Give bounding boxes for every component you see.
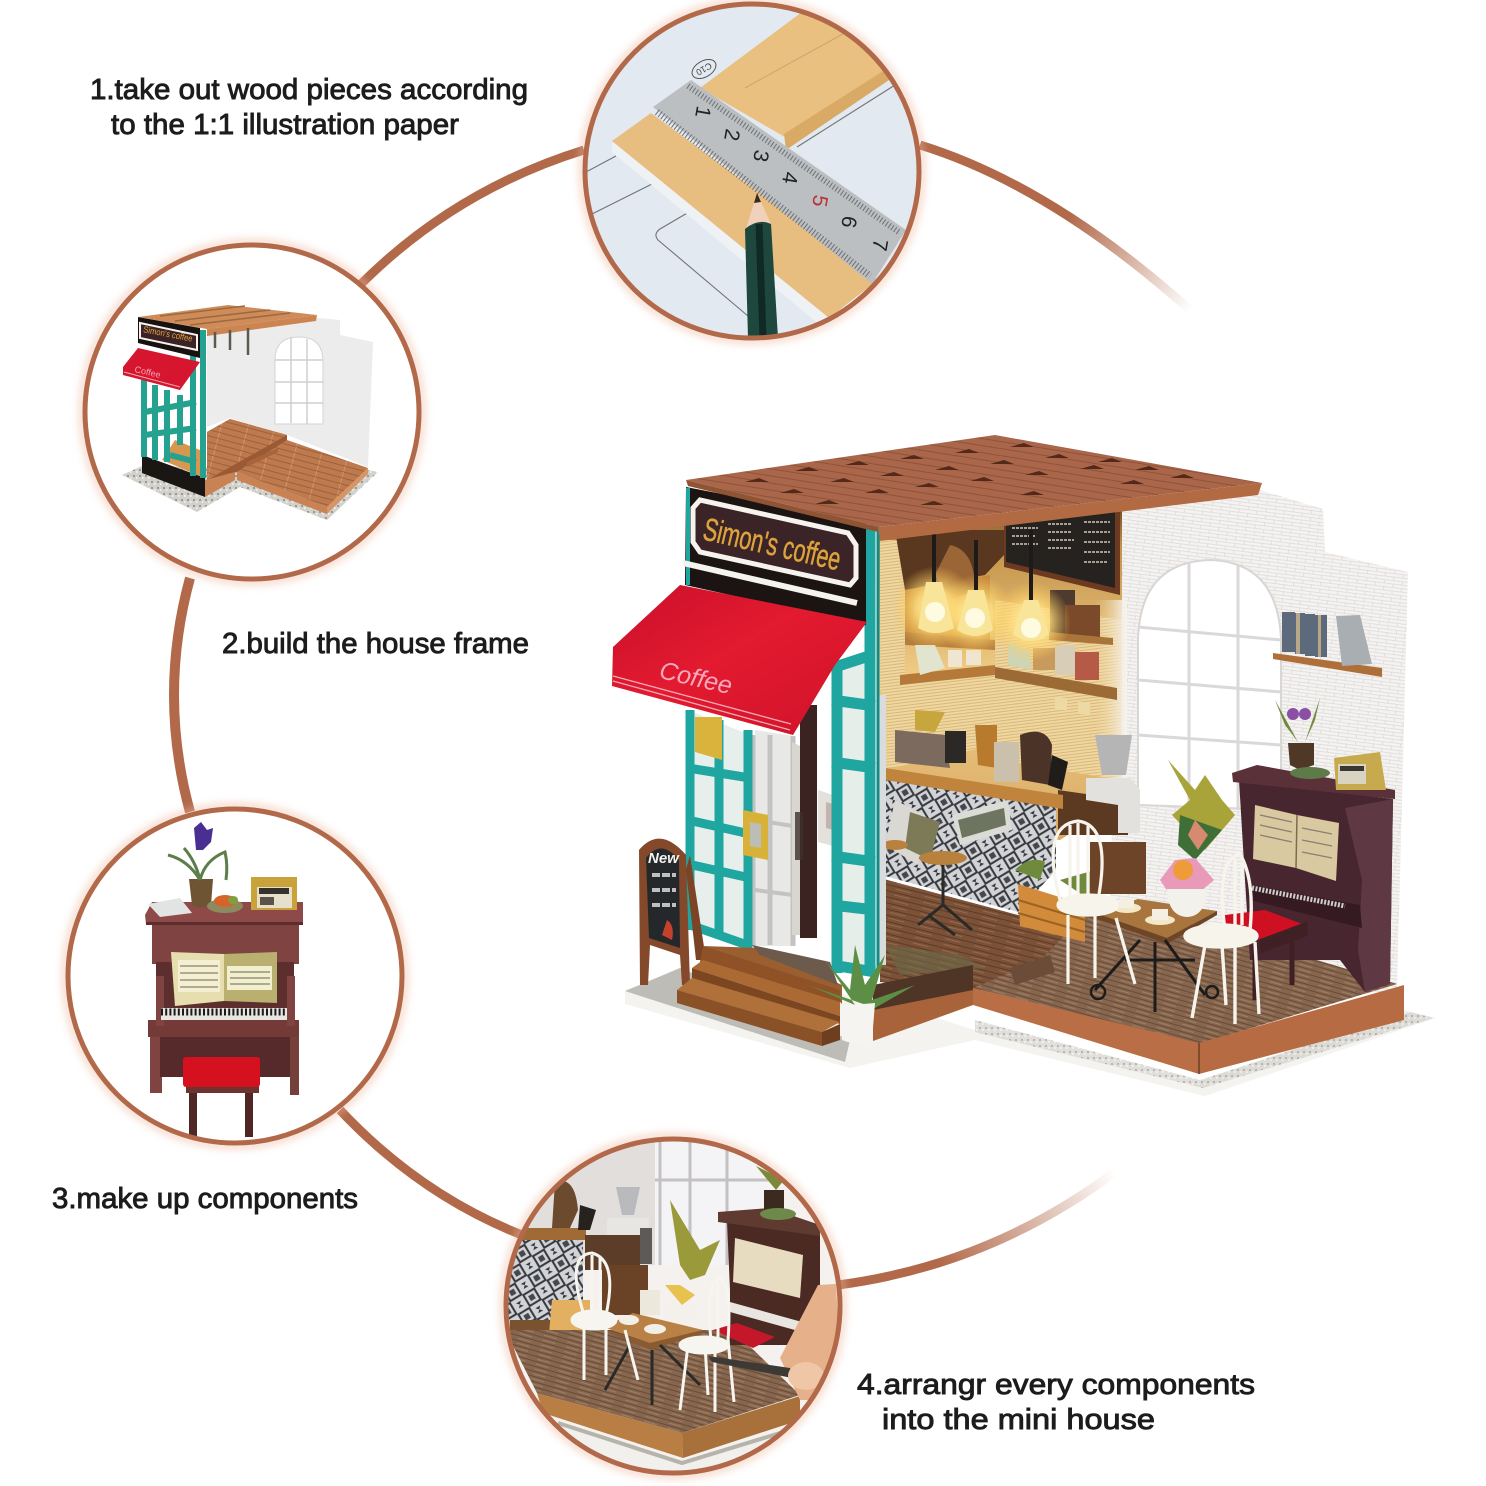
connecting arc: step 1 fading towards house (920, 145, 1190, 310)
open music book (171, 952, 277, 1006)
connecting arc: step 4 fading towards house (838, 1172, 1115, 1285)
steel ruler (653, 80, 906, 284)
step 4 caption: into the mini house (882, 1404, 1155, 1436)
white chair right (1185, 854, 1259, 1024)
raised wooden floor (880, 878, 1100, 992)
table (603, 1313, 704, 1405)
step 1 caption (90, 74, 528, 141)
floor and base (510, 1330, 800, 1466)
step 1 caption: 1.take out wood pieces according (90, 74, 528, 106)
small potted orchid (1275, 698, 1320, 770)
plain back wall (207, 318, 373, 467)
steel ruler: 7 (867, 237, 892, 253)
piano (718, 1208, 820, 1345)
paper on piano (148, 898, 192, 917)
flowers and vase (640, 1200, 720, 1326)
black shop fascia (685, 487, 866, 625)
piano body (145, 902, 303, 1095)
bar stools (882, 840, 972, 935)
connecting arc: step 3 to step 4 (340, 1110, 522, 1235)
white trim under sign (683, 563, 857, 603)
step 3 caption: 3.make up components (52, 1183, 358, 1215)
step 1 caption: to the 1:1 illustration paper (111, 109, 459, 141)
white base and gravel (625, 968, 1436, 1096)
coffee table (1091, 898, 1218, 1012)
three glowing pendant lamps (893, 530, 1071, 662)
white chairs (572, 1253, 734, 1412)
circle 3: piano component (65, 806, 405, 1146)
wooden plinth (873, 965, 1404, 1074)
wooden entrance steps (677, 945, 842, 1046)
chalkboard menu (1004, 510, 1120, 595)
circled part mark C10 (692, 59, 716, 79)
hand holding tweezers (708, 1284, 842, 1400)
teal right door frame (832, 525, 875, 975)
red piano bench (183, 1057, 260, 1137)
green floor mat (885, 945, 985, 975)
white brick right wall (1110, 490, 1408, 1010)
new menu a-frame sign: New (648, 850, 680, 867)
warm interior wall (878, 505, 1122, 840)
coffee counter (885, 768, 1063, 912)
grey strip beside door post (879, 695, 886, 965)
potted purple flower (168, 822, 227, 908)
circled part mark C10: C10 (694, 61, 714, 77)
window (655, 1140, 775, 1265)
red awning (612, 585, 867, 735)
circle 1: measuring wood with ruler and pencil (580, 0, 925, 345)
wooden wall shelves (900, 632, 1117, 700)
steel ruler: 6 (836, 214, 861, 230)
red awning (123, 348, 200, 390)
yellow radio (1334, 752, 1386, 790)
steel ruler: 3 (748, 148, 773, 164)
steel ruler: 1 (690, 104, 715, 120)
teal left door frame (688, 705, 817, 948)
white chair left (1053, 821, 1135, 984)
shop sign (138, 317, 200, 358)
arched window (275, 337, 323, 424)
main finished coffee house model (612, 435, 1436, 1096)
circle 4: arranging components in the mini house (500, 1135, 850, 1480)
steel ruler: 2 (719, 127, 744, 143)
red awning: Coffee (657, 656, 735, 700)
pencil (745, 193, 778, 338)
fruit plate (207, 895, 243, 913)
dark upright piano (1232, 765, 1395, 992)
warm-to-white wall transition (1095, 600, 1127, 800)
flower arrangement (1160, 760, 1235, 917)
small floor step block (1010, 955, 1055, 985)
counter with tile (508, 1228, 586, 1330)
step 4 caption (857, 1369, 1255, 1436)
cups, jars and packets on shelf (915, 642, 1099, 714)
upper wood strip (700, 6, 892, 150)
shop sign: Simon's coffee (143, 324, 193, 344)
lower wooden floor (973, 900, 1397, 1044)
lower wood strip (612, 113, 880, 330)
outer teal edge (876, 520, 880, 975)
connecting arc: step 1 to step 2 (360, 150, 584, 285)
crate and box (549, 1265, 648, 1330)
step 2 caption: 2.build the house frame (222, 628, 529, 660)
orange entry steps (162, 440, 200, 476)
new menu a-frame sign (639, 839, 706, 985)
red piano bench (1225, 910, 1305, 1000)
teal door frame (144, 330, 203, 478)
simon's coffee sign plaque (693, 500, 856, 585)
plant pot (756, 1166, 796, 1220)
radio (251, 877, 297, 910)
hanging lamp rods (215, 328, 248, 355)
roof beams (138, 305, 317, 336)
keyboard (161, 1008, 287, 1020)
cabinet behind counter (1058, 790, 1128, 835)
gravel base (122, 466, 378, 520)
red awning: Coffee (134, 364, 162, 380)
steel ruler: 5 (807, 193, 832, 209)
black base (142, 455, 205, 497)
counter goods (895, 710, 1140, 833)
pale panes in right frame (837, 660, 870, 970)
kettle and coffee machine (552, 1181, 652, 1270)
circle 2: house frame (82, 242, 422, 582)
arched window (1138, 560, 1281, 810)
plate of food (1290, 767, 1330, 779)
wall book shelf (1273, 612, 1382, 677)
teal left post top (686, 488, 690, 585)
floor planks (205, 419, 368, 514)
step 4 caption: 4.arrangr every components (857, 1369, 1255, 1401)
door hanging spring and note (795, 790, 848, 860)
connecting arc: step 2 to step 3 (174, 578, 190, 812)
red seat (713, 1323, 775, 1348)
box behind table (1090, 842, 1146, 894)
snake plant in white pot (808, 945, 915, 1043)
simon's coffee sign plaque: Simon's coffee (700, 511, 844, 577)
wooden crate (1015, 860, 1095, 942)
upper shelf goods (895, 530, 1100, 640)
steel ruler: 4 (777, 170, 802, 186)
roof top (686, 435, 1262, 541)
